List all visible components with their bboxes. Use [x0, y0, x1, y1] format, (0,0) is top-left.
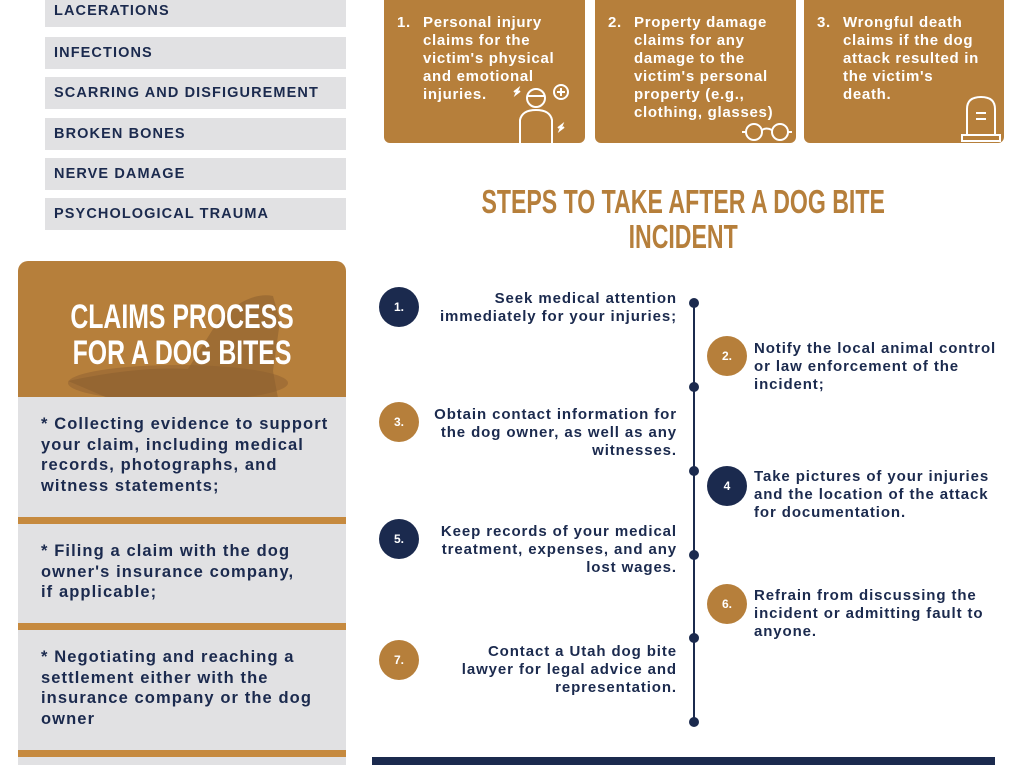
claim step 2: [18, 524, 346, 623]
step 5: lost wages.: [586, 559, 677, 576]
icon: glasses: [742, 123, 792, 141]
card: property damage: Property damage: [634, 14, 767, 31]
step 2: 2.: [722, 349, 732, 363]
icon: tombstone: [961, 96, 1001, 142]
heading: [70, 298, 294, 372]
step 7: Contact a Utah dog bite: [488, 643, 677, 660]
bottom navy bar: [372, 757, 995, 765]
item: infections: INFECTIONS: [54, 45, 153, 61]
step 1: immediately for your injuries;: [440, 308, 677, 325]
card: property damage: [595, 0, 796, 143]
step 6: incident or admitting fault to: [754, 605, 984, 622]
heading: FOR A DOG BITES: [73, 334, 291, 372]
card: personal injury: and emotional: [423, 68, 534, 85]
card: wrongful death: attack resulted in: [843, 50, 979, 67]
claim step 3: * Negotiating and reaching a: [41, 648, 295, 666]
step 1: 1.: [394, 300, 404, 314]
step 5: 5.: [394, 532, 404, 546]
step 4: 4: [724, 479, 730, 493]
step 6: [707, 584, 984, 640]
panel: claims process: [18, 261, 346, 397]
claim step 1: [18, 397, 346, 517]
list: injury types: [45, 0, 346, 230]
heading: CLAIMS PROCESS: [70, 298, 294, 336]
card: property damage: property (e.g.,: [634, 86, 745, 103]
claim step 3: settlement either with the: [41, 668, 269, 686]
step 3: witnesses.: [592, 442, 677, 459]
claim step 1: witness statements;: [41, 476, 220, 494]
title: steps: [481, 183, 885, 255]
icon: injured person: [514, 84, 569, 143]
claim step 2: * Filing a claim with the dog: [41, 542, 290, 560]
card: personal injury: 1.: [397, 14, 411, 31]
claim step 1: your claim, including medical: [41, 436, 304, 454]
claim step 3: insurance company or the dog: [41, 689, 312, 707]
claim step 3: [18, 630, 346, 750]
card: personal injury: victim's physical: [423, 50, 554, 67]
card: property damage: claims for any: [634, 32, 745, 49]
item: scarring: [45, 77, 346, 109]
card: personal injury: Personal injury: [423, 14, 542, 31]
card: wrongful death: claims if the dog: [843, 32, 973, 49]
step 7: [379, 640, 677, 696]
step 3: [379, 402, 677, 459]
card: personal injury: [384, 0, 585, 143]
title: steps: STEPS TO TAKE AFTER A DOG BITE: [481, 183, 885, 220]
panel header: [18, 261, 346, 398]
step 1: Seek medical attention: [495, 290, 677, 307]
step 7: 7.: [394, 653, 404, 667]
step 4: for documentation.: [754, 504, 906, 521]
step 7: representation.: [555, 679, 677, 696]
item: nerve damage: [45, 158, 346, 190]
step 2: Notify the local animal control: [754, 340, 996, 357]
dog silhouette: [68, 295, 288, 397]
claim step 1: * Collecting evidence to support: [41, 415, 328, 433]
step 5: [379, 519, 677, 576]
card: wrongful death: Wrongful death: [843, 14, 963, 31]
step 1: [379, 287, 677, 327]
step 3: the dog owner, as well as any: [441, 424, 677, 441]
card: property damage: victim's personal: [634, 68, 768, 85]
claim step 2: owner's insurance company,: [41, 562, 294, 580]
step 5: Keep records of your medical: [441, 523, 677, 540]
title: steps: INCIDENT: [628, 218, 738, 255]
claim step 3: owner: [41, 710, 95, 728]
item: psychological trauma: PSYCHOLOGICAL TRAUMA: [54, 206, 269, 222]
step 6: anyone.: [754, 623, 817, 640]
card: wrongful death: the victim's: [843, 68, 933, 85]
step 3: 3.: [394, 415, 404, 429]
card: wrongful death: 3.: [817, 14, 831, 31]
step 4: Take pictures of your injuries: [754, 468, 989, 485]
item: infections: [45, 37, 346, 69]
card: personal injury: injuries.: [423, 86, 487, 103]
step 2: incident;: [754, 376, 825, 393]
item: nerve damage: NERVE DAMAGE: [54, 166, 185, 182]
item: broken bones: BROKEN BONES: [54, 126, 186, 142]
item: scarring: SCARRING AND DISFIGUREMENT: [54, 85, 319, 101]
card: property damage: 2.: [608, 14, 622, 31]
step 4: [707, 466, 989, 521]
card: wrongful death: death.: [843, 86, 891, 103]
step 4: and the location of the attack: [754, 486, 989, 503]
timeline: [693, 308, 695, 718]
claim step 1: records, photographs, and: [41, 456, 278, 474]
step 3: Obtain contact information for: [434, 406, 677, 423]
claim step 2: if applicable;: [41, 583, 157, 601]
card: property damage: damage to the: [634, 50, 745, 67]
step 6: Refrain from discussing the: [754, 587, 977, 604]
item: broken bones: [45, 118, 346, 150]
card: wrongful death: [804, 0, 1004, 143]
step 2: or law enforcement of the: [754, 358, 959, 375]
step 6: 6.: [722, 597, 732, 611]
step 7: lawyer for legal advice and: [462, 661, 677, 678]
item: lacerations: [45, 0, 346, 27]
step 2: [707, 336, 996, 393]
card: property damage: clothing, glasses): [634, 104, 773, 121]
card: personal injury: claims for the: [423, 32, 530, 49]
item: psychological trauma: [45, 198, 346, 230]
step 5: treatment, expenses, and any: [442, 541, 677, 558]
item: lacerations: LACERATIONS: [54, 3, 170, 19]
